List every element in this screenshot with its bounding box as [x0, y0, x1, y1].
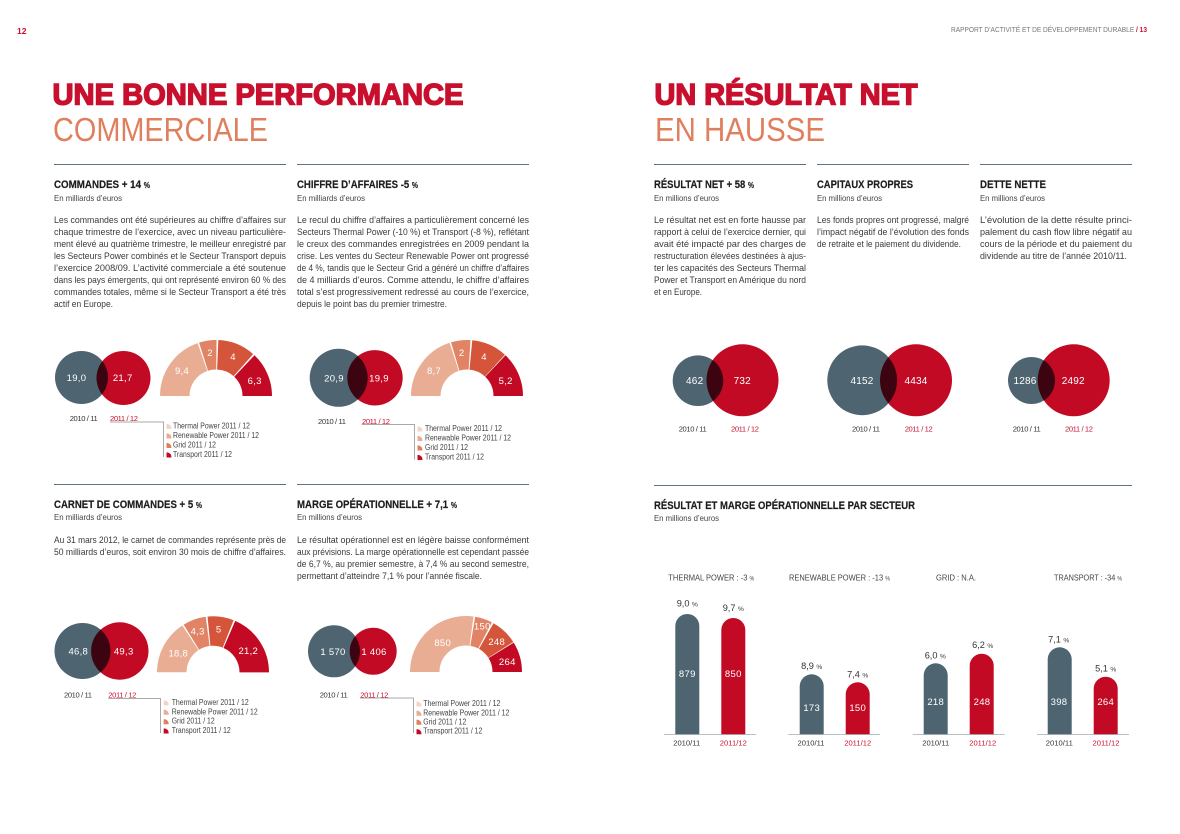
text block: dette nette: En millions d’euros	[980, 193, 1045, 203]
bar chart: grid: 2011/12	[969, 738, 996, 748]
text block: marge opérationnelle: Le résultat opérationnel est en légère baisse conformément	[297, 535, 529, 545]
text block: commandes: chaque trimestre de l’exercice, avec un niveau particulière-	[54, 227, 286, 237]
text block: marge opérationnelle: MARGE OPÉRATIONNELLE + 7,1 %	[297, 498, 457, 511]
text block: chiffre d'affaires: de 4 milliards d’euros. Comme attendu, le chiffre d’affaires	[297, 275, 529, 285]
venn: carnet de commandes: 49,3	[114, 646, 134, 658]
half donut: commandes: 4	[230, 352, 236, 363]
legend: carnet de commandes	[108, 698, 258, 735]
text block: dette nette: cours de la période et du paiement du	[980, 239, 1132, 249]
venn: résultat net: 732	[734, 376, 751, 387]
legend: commandes: Renewable Power 2011 / 12	[173, 431, 259, 440]
bar chart: transport: 398	[1051, 697, 1067, 708]
text block: marge opérationnelle: permettant d’atteindre 7,1 % pour l’année fiscale.	[297, 571, 482, 581]
bar chart: transport: 5,1 %	[1095, 664, 1116, 674]
text block: résultat net	[654, 178, 806, 297]
text block: résultat net: rapport à celui de l’exercice dernier, qui	[654, 227, 806, 237]
legend: chiffre d'affaires	[362, 424, 511, 462]
text block: chiffre d'affaires: En milliards d’euros	[297, 193, 365, 203]
text block: commandes: dans les pays émergents, qui ont représenté environ 60 % des	[54, 275, 286, 285]
venn: capitaux propres: 2011 / 12	[905, 424, 933, 434]
venn: capitaux propres: 4434	[904, 376, 928, 387]
bar chart: grid	[913, 572, 1005, 748]
text block: résultat net: avait été impacté par des charges de	[654, 239, 806, 249]
legend: carnet de commandes: Renewable Power 2011 / 12	[172, 707, 258, 716]
running header right: RAPPORT D’ACTIVITÉ ET DE DÉVELOPPEMENT DURABLE / 13	[951, 25, 1147, 34]
text block: dette nette	[980, 179, 1132, 261]
text block: résultat et marge par secteur: En millions d’euros	[654, 513, 719, 523]
legend: chiffre d'affaires: Grid 2011 / 12	[425, 443, 468, 452]
half donut: chiffre d'affaires: 5,2	[499, 376, 513, 387]
bar chart: thermal power: 9,7 %	[723, 603, 744, 613]
bar chart: grid: 2010/11	[922, 738, 949, 748]
half donut: commandes: 6,3	[248, 376, 262, 387]
text block: carnet de commandes: 50 milliards d’euros, soit environ 30 mois de chiffre d’affaires.	[54, 547, 286, 557]
bar chart: grid: 6,2 %	[972, 640, 993, 650]
venn: chiffre d'affaires: 19,9	[369, 373, 389, 384]
venn: dette nette: 1286	[1013, 376, 1037, 387]
legend: commandes	[110, 422, 259, 459]
text block: commandes: les Secteurs Power combinés et le Secteur Transport depuis	[54, 251, 286, 261]
bar chart: transport: 2010/11	[1046, 738, 1073, 748]
text block: chiffre d'affaires: Le recul du chiffre d’affaires a particulièrement concerné les	[297, 215, 529, 225]
venn: chiffre d'affaires	[310, 349, 403, 426]
text block: chiffre d'affaires: le creux des commandes enregistrées en 2009 pendant la	[297, 239, 530, 249]
text block: dette nette: dividende au titre de l’année 2010/11.	[980, 251, 1127, 261]
bar chart: grid: 218	[927, 697, 944, 708]
legend: commandes: Grid 2011 / 12	[173, 440, 216, 450]
bar chart: renewable power: 173	[803, 703, 820, 714]
text block: chiffre d'affaires: depuis le point bas du premier trimestre.	[297, 299, 447, 309]
half donut: commandes	[158, 338, 274, 454]
venn: capitaux propres: 4152	[850, 376, 874, 387]
title left: UNE BONNE PERFORMANCE	[52, 78, 464, 112]
bar chart: renewable power: 8,9 %	[801, 661, 822, 671]
bar chart: renewable power	[788, 572, 891, 748]
text block: dette nette: L’évolution de la dette résulte princi-	[980, 215, 1132, 225]
bar chart: renewable power: RENEWABLE POWER : -13 %	[789, 572, 891, 582]
text block: commandes	[54, 179, 286, 309]
text block: capitaux propres: l’impact négatif de l’évolution des fonds	[817, 227, 969, 237]
text block: chiffre d'affaires: CHIFFRE D’AFFAIRES -5 %	[297, 179, 418, 191]
bar chart: renewable power: 150	[849, 703, 866, 714]
text block: carnet de commandes: Au 31 mars 2012, le carnet de commandes représente près de	[54, 535, 286, 545]
text block: résultat et marge par secteur: RÉSULTAT ET MARGE OPÉRATIONNELLE PAR SECTEUR	[654, 499, 915, 512]
half donut: marge opérationnelle: 248	[488, 637, 505, 648]
text block: résultat net: RÉSULTAT NET + 58 %	[654, 178, 754, 191]
text block: capitaux propres: de retraite et le paiement du dividende.	[817, 239, 961, 249]
text block: résultat net: ter les capacités des Secteurs Thermal	[654, 263, 806, 273]
text block: commandes: actif en Europe.	[54, 299, 113, 309]
text block: commandes: ment élevé au quatrième trimestre, le meilleur enregistré par	[54, 239, 286, 249]
legend: commandes: Transport 2011 / 12	[173, 450, 232, 459]
venn: dette nette: 2011 / 12	[1065, 424, 1093, 434]
bar chart: renewable power: 7,4 %	[847, 669, 868, 679]
text block: marge opérationnelle: aux prévisions. La marge opérationnelle est cependant passée	[297, 547, 529, 557]
bar chart: thermal power: 879	[679, 669, 696, 680]
legend: marge opérationnelle: Renewable Power 2011 / 12	[423, 708, 509, 717]
bar chart: grid: 6,0 %	[925, 651, 946, 661]
text block: résultat net: En millions d’euros	[654, 193, 719, 203]
half donut: marge opérationnelle: 850	[434, 638, 451, 649]
legend: carnet de commandes: Transport 2011 / 12	[172, 726, 231, 735]
venn: marge opérationnelle: 1 570	[320, 647, 346, 658]
text block: carnet de commandes	[54, 499, 286, 557]
legend: marge opérationnelle: Grid 2011 / 12	[423, 717, 466, 726]
bar chart: transport: TRANSPORT : -34 %	[1054, 572, 1123, 582]
text block: chiffre d'affaires: total s’est progressivement redressé au cours de l’exercice,	[297, 287, 529, 297]
text block: commandes: l’exercice 2008/09. L’activité commerciale a été soutenue	[54, 263, 286, 273]
legend: chiffre d'affaires: Renewable Power 2011 / 12	[425, 434, 511, 442]
title left: COMMERCIALE	[53, 112, 268, 149]
bar chart: renewable power: 2011/12	[844, 738, 871, 748]
bar chart: transport: 7,1 %	[1048, 634, 1069, 644]
half donut: carnet de commandes: 18,8	[168, 648, 188, 660]
legend: marge opérationnelle	[360, 698, 509, 736]
half donut: marge opérationnelle: 150	[474, 622, 491, 632]
text block: carnet de commandes: En milliards d’euros	[54, 512, 122, 522]
venn: chiffre d'affaires: 2011 / 12	[362, 417, 390, 426]
bar chart: thermal power: 850	[725, 669, 742, 680]
text block: capitaux propres: Les fonds propres ont progressé, malgré	[817, 215, 969, 225]
text block: résultat net: et en Europe.	[654, 287, 702, 297]
venn: commandes	[55, 351, 150, 423]
venn: commandes: 19,0	[67, 373, 86, 384]
venn: marge opérationnelle: 2011 / 12	[360, 690, 388, 700]
text block: dette nette: DETTE NETTE	[980, 179, 1046, 191]
half donut: carnet de commandes: 4,3	[191, 626, 205, 638]
legend: marge opérationnelle: Thermal Power 2011 / 12	[423, 699, 500, 708]
title right	[654, 78, 918, 149]
half donut: commandes: 9,4	[175, 366, 189, 377]
venn: marge opérationnelle	[308, 625, 397, 700]
legend: carnet de commandes: Grid 2011 / 12	[172, 717, 215, 726]
legend: commandes: Thermal Power 2011 / 12	[173, 422, 250, 430]
venn: carnet de commandes	[54, 622, 148, 700]
bar chart: thermal power: 2010/11	[673, 738, 700, 748]
half donut: carnet de commandes	[156, 616, 270, 729]
text block: dette nette: palement du cash flow libre négatif au	[980, 227, 1132, 237]
text block: marge opérationnelle: de 6,7 %, au premier semestre, à 7,4 % au second semestre,	[297, 559, 529, 569]
legend: marge opérationnelle: Transport 2011 / 12	[423, 727, 482, 736]
bar chart: transport: 2011/12	[1092, 738, 1120, 748]
text block: capitaux propres	[817, 179, 969, 249]
title right: UN RÉSULTAT NET	[654, 78, 918, 112]
half donut: chiffre d'affaires: 4	[481, 352, 487, 363]
text block: résultat et marge par secteur	[654, 499, 915, 523]
text block: commandes: COMMANDES + 14 %	[54, 179, 150, 191]
venn: capitaux propres: 2010 / 11	[852, 424, 880, 434]
text block: résultat net: restructuration élevées destinées à ajus-	[654, 251, 806, 261]
text block: carnet de commandes: CARNET DE COMMANDES + 5 %	[54, 499, 202, 511]
venn: carnet de commandes: 2011 / 12	[108, 690, 136, 700]
venn: commandes: 21,7	[113, 373, 133, 384]
bar chart: renewable power: 2010/11	[798, 738, 824, 748]
text block: chiffre d'affaires	[297, 179, 530, 309]
text block: chiffre d'affaires: de 4 %, tandis que le Secteur Grid a généré un chiffre d’affaires	[297, 263, 529, 273]
text block: résultat net: Le résultat net est en forte hausse par	[654, 215, 806, 225]
venn: carnet de commandes: 2010 / 11	[64, 690, 92, 700]
title left	[52, 78, 464, 149]
half donut: chiffre d'affaires: 2	[459, 348, 464, 359]
text block: marge opérationnelle	[297, 498, 529, 581]
venn: commandes: 2010 / 11	[70, 414, 98, 423]
venn: résultat net: 462	[686, 376, 704, 387]
bar chart: transport: 264	[1097, 697, 1114, 708]
venn: chiffre d'affaires: 2010 / 11	[318, 417, 346, 426]
legend: carnet de commandes: Thermal Power 2011 / 12	[172, 698, 249, 707]
bar chart: grid: 248	[974, 697, 990, 708]
venn: dette nette: 2492	[1062, 376, 1085, 387]
venn: résultat net: 2011 / 12	[731, 424, 759, 434]
half donut: chiffre d'affaires: 8,7	[427, 366, 441, 377]
text block: chiffre d'affaires: Secteurs Thermal Power (-10 %) et Transport (-8 %), reflétant	[297, 227, 529, 237]
venn: dette nette	[1008, 344, 1110, 434]
bar chart: transport	[1037, 572, 1129, 748]
half donut: marge opérationnelle	[409, 615, 523, 729]
text block: chiffre d'affaires: crise. Les ventes du Secteur Renewable Power ont progressé	[297, 251, 529, 261]
venn: résultat net	[673, 344, 778, 434]
title right: EN HAUSSE	[655, 112, 825, 149]
bar chart: grid: GRID : N.A.	[936, 572, 976, 582]
text block: résultat net: Power et Transport en Amérique du nord	[654, 275, 806, 285]
bar chart: thermal power: 9,0 %	[677, 598, 698, 608]
bar chart: thermal power: 2011/12	[720, 738, 747, 748]
page number left: 12	[17, 26, 27, 36]
half donut: commandes: 2	[207, 348, 213, 359]
legend: chiffre d'affaires: Thermal Power 2011 / 12	[425, 424, 502, 433]
bar chart: thermal power	[664, 572, 756, 748]
half donut: carnet de commandes: 21,2	[238, 646, 258, 657]
legend: chiffre d'affaires: Transport 2011 / 12	[425, 452, 484, 462]
bar chart: thermal power: THERMAL POWER : -3 %	[668, 572, 755, 582]
half donut: carnet de commandes: 5	[216, 624, 221, 636]
text block: commandes: Les commandes ont été supérieures au chiffre d’affaires sur	[54, 215, 286, 225]
venn: marge opérationnelle: 2010 / 11	[320, 690, 348, 700]
text block: commandes: commandes totales, même si le Secteur Transport a été très	[54, 287, 286, 297]
venn: chiffre d'affaires: 20,9	[324, 373, 344, 384]
venn: commandes: 2011 / 12	[110, 414, 138, 423]
half donut: chiffre d'affaires	[409, 338, 525, 454]
venn: marge opérationnelle: 1 406	[361, 647, 387, 658]
text block: commandes: En milliards d’euros	[54, 193, 122, 203]
venn: dette nette: 2010 / 11	[1013, 424, 1041, 434]
text block: capitaux propres: CAPITAUX PROPRES	[817, 179, 913, 191]
half donut: marge opérationnelle: 264	[499, 657, 516, 668]
text block: marge opérationnelle: En millions d’euros	[297, 512, 362, 522]
venn: capitaux propres	[827, 344, 952, 434]
venn: résultat net: 2010 / 11	[679, 424, 707, 434]
venn: carnet de commandes: 46,8	[68, 646, 88, 658]
text block: capitaux propres: En millions d’euros	[817, 193, 882, 203]
